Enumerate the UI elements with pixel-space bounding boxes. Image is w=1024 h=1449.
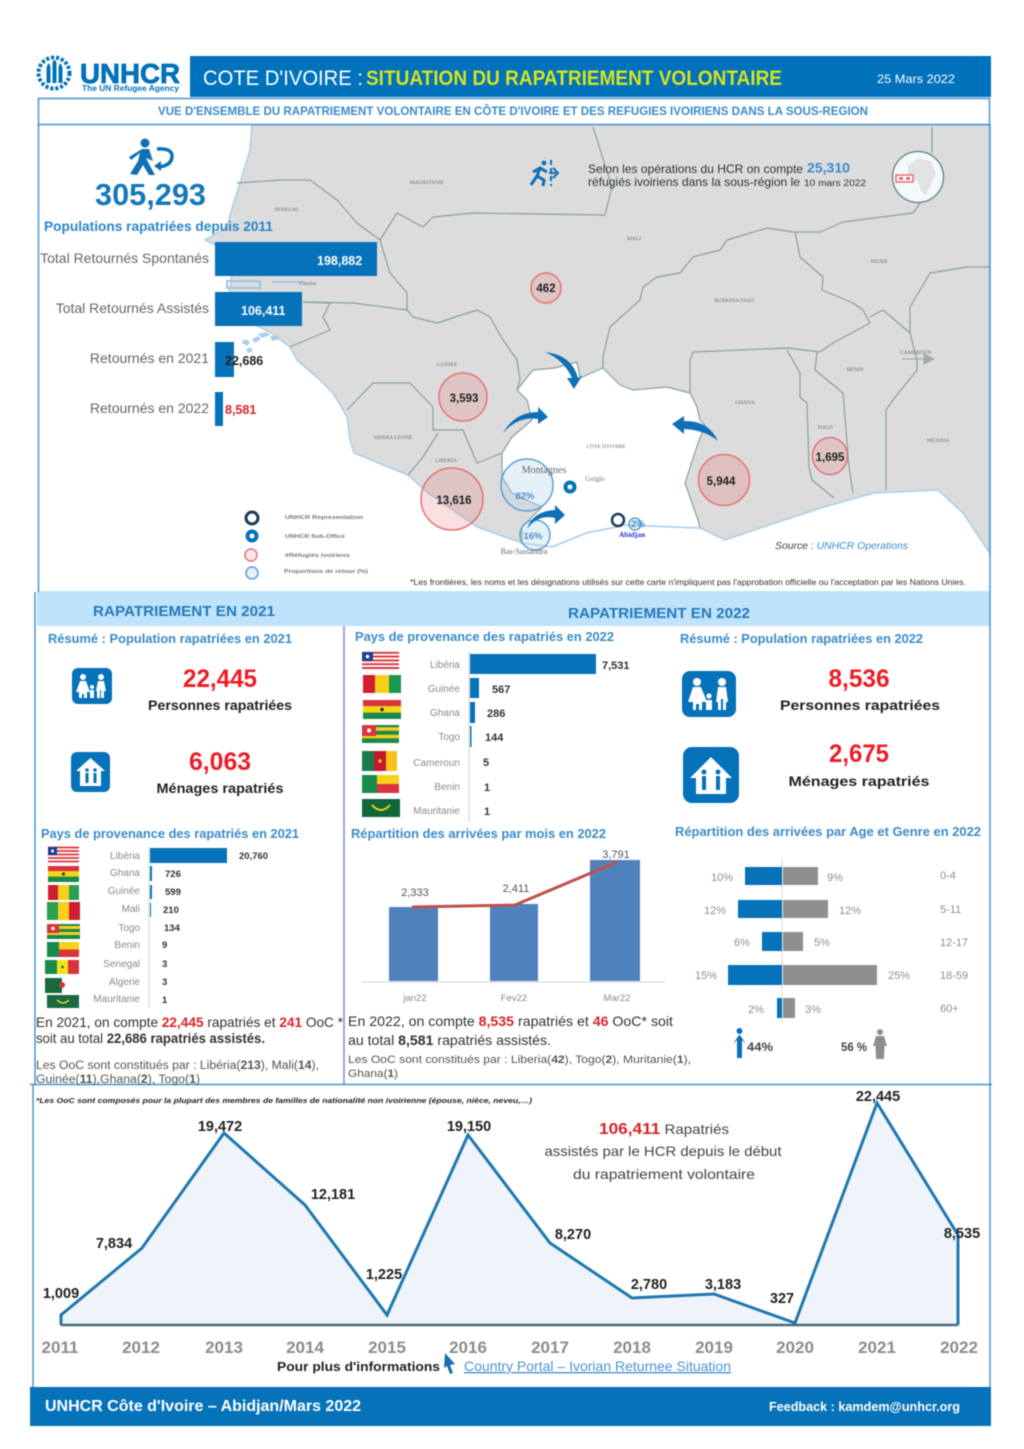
country labels: Senegal — [103, 959, 140, 970]
map: proportion labels: 16% — [523, 531, 543, 542]
total figure: 305,293 — [95, 177, 206, 212]
map: country labels: SENEGAL — [274, 207, 300, 213]
map: country labels: MALI — [627, 236, 641, 242]
more information link: Country Portal – Ivorian Returnee Situation — [464, 1358, 731, 1374]
map legend: UNHCR Representation — [285, 515, 364, 521]
heading: Pays de provenance des rapatriés en 2022 — [355, 629, 614, 644]
title banner: 25 Mars 2022 — [877, 72, 955, 86]
map: country labels: CÔTE D'IVOIRE — [586, 442, 626, 450]
pyramid chart: 15% — [695, 970, 717, 982]
text block: 2022 commentary: Ghana( 1) — [348, 1068, 398, 1080]
column chart: Mar22 — [604, 993, 630, 1004]
map: country labels: NIGERIA — [927, 438, 949, 444]
map: country labels: TOGO — [817, 425, 833, 431]
map: proportion labels: 2% — [631, 519, 645, 530]
area chart: returnees per year: 7,834 — [96, 1236, 132, 1252]
labels: Guinée — [428, 684, 460, 695]
area chart: returnees per year: 19,472 — [198, 1119, 242, 1135]
map: city labels: Guiglo — [585, 475, 605, 483]
subtitle bar — [38, 98, 990, 124]
pyramid chart: 10% — [711, 872, 733, 884]
values: 210 — [163, 905, 179, 916]
map: city labels — [501, 465, 646, 556]
map: bubble values: 3,593 — [450, 393, 478, 405]
panel: headline total — [44, 138, 273, 234]
text block: 2022 commentary — [348, 1013, 691, 1080]
map: country borders — [227, 127, 989, 498]
map: bubble values: 13,616 — [436, 495, 472, 507]
text block: 2021 commentary: Les OoC sont constitués par : Libéria( 213), Mali(14), — [36, 1060, 319, 1072]
title banner: COTE D'IVOIRE : — [203, 67, 363, 90]
footer: Feedback : kamdem@unhcr.org — [769, 1399, 960, 1414]
map: country labels: SIERRA LEONE — [374, 435, 413, 441]
map: Cote d'Ivoire coastline — [522, 525, 700, 547]
column chart: Fev22 — [501, 993, 527, 1004]
icon: male with percentage: 44% — [747, 1040, 773, 1054]
column chart — [362, 849, 665, 1004]
flags 2021 — [45, 847, 80, 1008]
bar chart: total returnees: Retournés en 2021 — [90, 350, 209, 366]
bar chart: total returnees: Retournés en 2022 — [90, 400, 209, 416]
map: proportion labels — [515, 491, 645, 542]
labels: Cameroun — [413, 758, 460, 769]
country labels: Algerie — [109, 977, 140, 988]
map: scale marker — [902, 354, 934, 364]
subtitle bar: VUE D'ENSEMBLE DU RAPATRIEMENT VOLONTAIRE EN CÔTE D'IVOIRE ET DES REFUGIES IVOIRIENS DANS LA SOUS-REGION — [158, 105, 868, 118]
icon: family — [72, 668, 112, 704]
pyramid chart: 6% — [734, 937, 750, 949]
pyramid chart: 9% — [827, 872, 843, 884]
area chart: returnees per year: 2021 — [858, 1338, 896, 1357]
bar chart: total returnees: 22,686 — [225, 354, 263, 368]
map: return proportion bubbles — [501, 459, 641, 550]
pyramid chart: 12% — [839, 905, 861, 917]
pyramid chart: 5-11 — [940, 904, 961, 916]
bar chart: total returnees: Total Retournés Spontanés — [40, 250, 209, 266]
map: return arrows — [503, 352, 718, 529]
callout: refugees in sub-region: réfugiés ivoiriens dans la sous-région le — [588, 175, 800, 189]
values: 599 — [165, 887, 181, 898]
panel: summary 2021: Personnes rapatriées — [148, 697, 292, 713]
map: country labels: CAMEROUN — [900, 350, 932, 356]
map: Cote d'Ivoire land border — [502, 362, 705, 543]
pyramid chart: 3% — [805, 1004, 821, 1016]
values: 1 — [484, 782, 490, 794]
labels: Mauritanie — [413, 806, 460, 817]
panel: summary 2022: Ménages rapatriés — [788, 773, 930, 789]
icon: male with percentage — [733, 1028, 773, 1058]
callout: assisted returnees: du rapatriement volontaire — [573, 1166, 755, 1182]
panel: summary 2022: Personnes rapatriées — [780, 697, 940, 713]
text block: 2021 commentary: soit au total 22,686 rapatriés assistés. — [36, 1030, 265, 1046]
households figure: 2,675 — [829, 740, 889, 768]
footer — [30, 1387, 991, 1426]
area chart: returnees per year: 2016 — [449, 1338, 487, 1357]
map: bubble values — [436, 283, 845, 507]
area chart: returnees per year: 2019 — [695, 1338, 733, 1357]
text block: 2021 commentary — [36, 1014, 344, 1086]
area chart: returnees per year: 327 — [770, 1291, 794, 1307]
area chart: returnees per year: 2014 — [286, 1338, 324, 1357]
total caption: Populations rapatriées depuis 2011 — [44, 218, 273, 234]
icon: household — [71, 752, 110, 792]
bar chart: total returnees: 198,882 — [317, 254, 362, 268]
map: bubble values: 1,695 — [816, 452, 845, 464]
source: Source : UNHCR Operations — [775, 541, 908, 552]
area chart: returnees per year: 2017 — [531, 1338, 569, 1357]
values: 5 — [483, 757, 489, 769]
map: city labels: Abidjan — [619, 530, 646, 539]
country labels: Mali — [122, 904, 140, 915]
panel: countries of origin 2021 — [41, 826, 299, 1008]
area chart: returnees per year: 2022 — [940, 1338, 978, 1357]
panel: summary 2022 — [680, 631, 940, 803]
map: country labels: GHANA — [735, 400, 755, 406]
labels: Libéria — [430, 660, 460, 671]
area chart: returnees per year: 22,445 — [856, 1089, 900, 1105]
bar chart: total returnees — [40, 242, 377, 426]
callout: refugees in sub-region: 10 mars 2022 — [804, 178, 866, 188]
values: 7,531 — [602, 660, 630, 672]
map: refugee bubbles — [421, 273, 848, 530]
callout: refugees in sub-region: Selon les opérations du HCR on compte — [588, 162, 803, 176]
map: bubble values: 462 — [536, 283, 556, 295]
column chart: 2,333 — [401, 887, 429, 899]
icon: female with percentage: 56 % — [841, 1040, 867, 1054]
map: city labels: Bas-Sassandra — [501, 547, 548, 556]
pyramid chart: 2% — [748, 1004, 764, 1016]
area chart: returnees per year — [42, 1089, 980, 1357]
country labels: Guinée — [108, 886, 140, 897]
area chart: returnees per year: 2020 — [776, 1338, 814, 1357]
axis — [148, 847, 150, 1008]
pyramid chart: 12-17 — [940, 937, 968, 949]
section band: RAPATRIEMENT EN 2022 — [568, 605, 750, 622]
values — [162, 851, 268, 1006]
callout: assisted returnees — [544, 1121, 782, 1182]
area chart: returnees per year: 8,535 — [944, 1226, 980, 1242]
area chart: returnees per year: 3,183 — [705, 1277, 741, 1293]
bar chart: total returnees: 106,411 — [241, 304, 286, 318]
map: city labels: Montagnes — [522, 465, 566, 476]
more information link: Pour plus d'informations — [277, 1359, 440, 1374]
values: 3 — [162, 977, 167, 988]
map legend: UNHCR Sub-Office — [285, 534, 345, 540]
map: land mass — [205, 125, 989, 552]
logo: UNHCR — [38, 58, 180, 93]
pyramid chart: 12% — [704, 905, 726, 917]
map legend: #Réfugiés ivoiriens — [285, 553, 350, 559]
persons figure: 22,445 — [183, 665, 257, 693]
text block: 2021 commentary: Guinée(11),Ghana( 2), Togo(1) — [36, 1074, 200, 1086]
callout: refugees in sub-region: 25,310 — [807, 160, 850, 176]
values: 144 — [485, 732, 504, 744]
area chart: returnees per year: 19,150 — [447, 1119, 491, 1135]
icon: female with percentage — [841, 1029, 887, 1059]
icon: refugee running to border — [531, 160, 558, 186]
area chart: returnees per year: 2012 — [122, 1338, 160, 1357]
values: 9 — [162, 940, 167, 951]
map disclaimer: *Les frontières, les noms et les désignations utilisés sur cette carte n'impliquent pas l'approbation officielle ou l'acceptation par les Nations Unies. — [410, 577, 966, 587]
values — [483, 660, 630, 818]
logo: UNHCR: UNHCR — [80, 58, 180, 89]
area chart: returnees per year: 2013 — [205, 1338, 243, 1357]
country labels: Benin — [114, 940, 140, 951]
map: proportion labels: 82% — [515, 491, 535, 502]
map: country labels: MAURITANIE — [410, 180, 445, 186]
panel: summary 2021 — [48, 631, 292, 796]
panel: age and gender 2022 — [675, 824, 981, 1059]
map: country labels — [274, 180, 949, 464]
area chart: returnees per year: 1,009 — [43, 1286, 79, 1302]
footnote: *Les OoC sont composés pour la plupart des membres de familles de nationalité non ivoirienne (épouse, nièce, neveu,…) — [36, 1096, 533, 1105]
text block: 2022 commentary: au total 8,581 rapatriés assistés. — [348, 1032, 551, 1048]
title banner: SITUATION DU RAPATRIEMENT VOLONTAIRE — [366, 67, 782, 90]
country labels: Togo — [118, 923, 140, 934]
values: 20,760 — [239, 851, 268, 862]
country labels — [93, 851, 140, 1005]
pyramid chart: 5% — [814, 937, 830, 949]
icon: family — [682, 671, 736, 717]
pyramid chart — [695, 858, 968, 1022]
bar chart: total returnees: Total Retournés Assistés — [56, 300, 209, 316]
labels — [413, 660, 460, 817]
country labels: Ghana — [110, 868, 140, 879]
more information link — [277, 1353, 731, 1374]
labels: Togo — [438, 732, 460, 743]
map panel — [205, 125, 989, 587]
pyramid chart: 25% — [888, 970, 910, 982]
inset: globe locator — [892, 152, 944, 202]
text block: 2022 commentary: Les OoC sont constitués par : Liberia( 42), Togo( 2), Muritanie( 1), — [348, 1054, 691, 1066]
icon: person returning — [129, 138, 172, 175]
column chart: jan22 — [402, 993, 427, 1004]
map: country labels: BURKINA FASO — [714, 298, 754, 304]
text block: 2022 commentary: En 2022, on compte 8,535 rapatriés et 46 OoC* soit — [348, 1013, 673, 1029]
map: coastal islands — [241, 332, 280, 353]
map legend: Proportions de retour (%) — [284, 569, 368, 575]
panel: summary 2021: Ménages rapatriés — [156, 780, 284, 796]
country labels: Libéria — [110, 851, 140, 862]
callout: assisted returnees: 106,411 Rapatriés — [599, 1121, 729, 1138]
panel: countries of origin 2022 — [355, 629, 630, 822]
map legend — [245, 512, 368, 579]
bar chart: total returnees: 8,581 — [225, 403, 256, 417]
values: 1 — [484, 806, 490, 818]
section band — [37, 591, 990, 626]
values: 726 — [165, 869, 181, 880]
area chart: returnees per year: 12,181 — [311, 1187, 355, 1203]
values: 1 — [162, 995, 168, 1006]
callout: assisted returnees: assistés par le HCR depuis le début — [544, 1143, 782, 1159]
map: bubble values: 5,944 — [707, 476, 736, 488]
heading: Résumé : Population rapatriées en 2022 — [680, 631, 923, 646]
map: country labels: BENIN — [847, 367, 863, 373]
area chart: returnees per year: 2,780 — [631, 1277, 667, 1293]
map: country labels: LIBERIA — [435, 458, 457, 464]
title banner — [190, 56, 991, 97]
logo: UNHCR: The UN Refugee Agency — [82, 84, 180, 93]
area chart: returnees per year: 1,225 — [366, 1267, 402, 1283]
pyramid chart: 60+ — [940, 1003, 959, 1015]
text block: 2021 commentary: En 2021, on compte 22,445 rapatriés et 241 OoC * — [36, 1014, 344, 1030]
bars — [150, 848, 227, 917]
households figure: 6,063 — [189, 748, 251, 776]
area chart: returnees per year: 8,270 — [555, 1227, 591, 1243]
pyramid chart: 18-59 — [940, 970, 968, 982]
panel: monthly arrivals 2022 — [351, 826, 665, 1004]
section band: RAPATRIEMENT EN 2021 — [93, 603, 275, 620]
footer: UNHCR Côte d'Ivoire – Abidjan/Mars 2022 — [45, 1398, 361, 1415]
pyramid chart: 0-4 — [940, 870, 956, 882]
heading: Répartition des arrivées par Age et Genre en 2022 — [675, 824, 981, 839]
map: country labels: NIGER — [871, 259, 888, 265]
heading: Répartition des arrivées par mois en 2022 — [351, 826, 606, 841]
country labels: Mauritanie — [93, 994, 140, 1005]
callout: refugees in sub-region — [588, 160, 866, 189]
column chart: 2,411 — [503, 883, 529, 895]
map: country labels: Gambie — [299, 281, 317, 287]
flags 2022 — [362, 652, 401, 817]
area chart: returnees per year: 2015 — [368, 1338, 406, 1357]
persons figure: 8,536 — [828, 665, 890, 693]
labels: Benin — [434, 782, 460, 793]
heading: Pays de provenance des rapatriés en 2021 — [41, 826, 299, 841]
heading: Résumé : Population rapatriées en 2021 — [48, 631, 292, 646]
icon: household — [683, 747, 739, 803]
labels: Ghana — [430, 708, 460, 719]
values: 567 — [492, 684, 510, 696]
bars — [470, 654, 596, 747]
values: 3 — [162, 959, 167, 970]
map: office markers — [564, 480, 624, 526]
map: country labels: GUINEE — [437, 362, 458, 368]
map: Cote d'Ivoire white territory — [502, 362, 705, 547]
values: 134 — [164, 923, 181, 934]
values: 286 — [487, 708, 505, 720]
axis — [468, 652, 470, 822]
area chart: returnees per year: 2018 — [613, 1338, 651, 1357]
area chart: returnees per year: 2011 — [42, 1338, 78, 1357]
column chart: 3,791 — [602, 849, 630, 861]
